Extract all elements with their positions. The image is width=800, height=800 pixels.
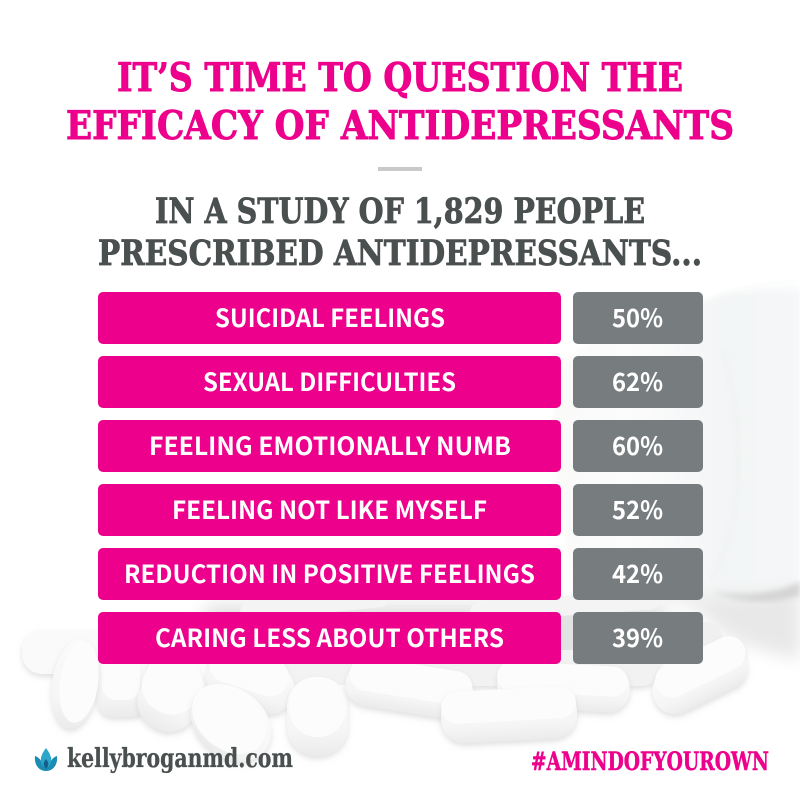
title (66, 55, 734, 149)
icon: lotus logo (35, 748, 57, 771)
website url: kellybroganmd.com (67, 744, 293, 774)
row: sexual difficulties (98, 356, 703, 408)
subtitle: IN A STUDY OF 1,829 PEOPLE (155, 191, 645, 232)
pill E (175, 669, 287, 777)
pill B (97, 650, 147, 717)
row: caring less about others (98, 612, 703, 664)
pill G (342, 655, 478, 723)
row: reduction in positive feelings (98, 548, 703, 600)
row: caring less about others: CARING LESS ABOUT OTHERS (155, 619, 504, 655)
row: caring less about others: 39% (612, 619, 663, 655)
pill F (287, 677, 348, 756)
far-left pill (22, 630, 112, 674)
row: suicidal feelings: SUICIDAL FEELINGS (215, 299, 445, 335)
title: IT’S TIME TO QUESTION THE (117, 55, 683, 101)
back pills behind rows (200, 586, 723, 686)
row: sexual difficulties: 62% (612, 363, 663, 399)
pill H (496, 661, 631, 713)
pill C (128, 644, 214, 742)
image: pile of white pills (22, 586, 755, 777)
subtitle (98, 191, 702, 274)
image: pill bottle (552, 282, 800, 660)
row: feeling emotionally numb: FEELING EMOTIONALLY NUMB (149, 427, 511, 463)
row: feeling emotionally numb: 60% (612, 427, 663, 463)
row: reduction in positive feelings: 42% (612, 555, 663, 591)
pill J (645, 630, 755, 722)
row: feeling not like myself (98, 484, 703, 536)
row: sexual difficulties: SEXUAL DIFFICULTIES (203, 363, 456, 399)
divider (378, 167, 422, 171)
row: feeling not like myself: 52% (612, 491, 663, 527)
subtitle: PRESCRIBED ANTIDEPRESSANTS... (98, 233, 702, 274)
row: feeling not like myself: FEELING NOT LIKE MYSELF (172, 491, 487, 527)
row: feeling emotionally numb (98, 420, 703, 472)
pill D (199, 640, 301, 721)
row: suicidal feelings (98, 292, 703, 344)
row: suicidal feelings: 50% (612, 299, 663, 335)
pill A (46, 636, 104, 732)
row: reduction in positive feelings: REDUCTION IN POSITIVE FEELINGS (124, 555, 535, 591)
pill I (440, 685, 578, 745)
